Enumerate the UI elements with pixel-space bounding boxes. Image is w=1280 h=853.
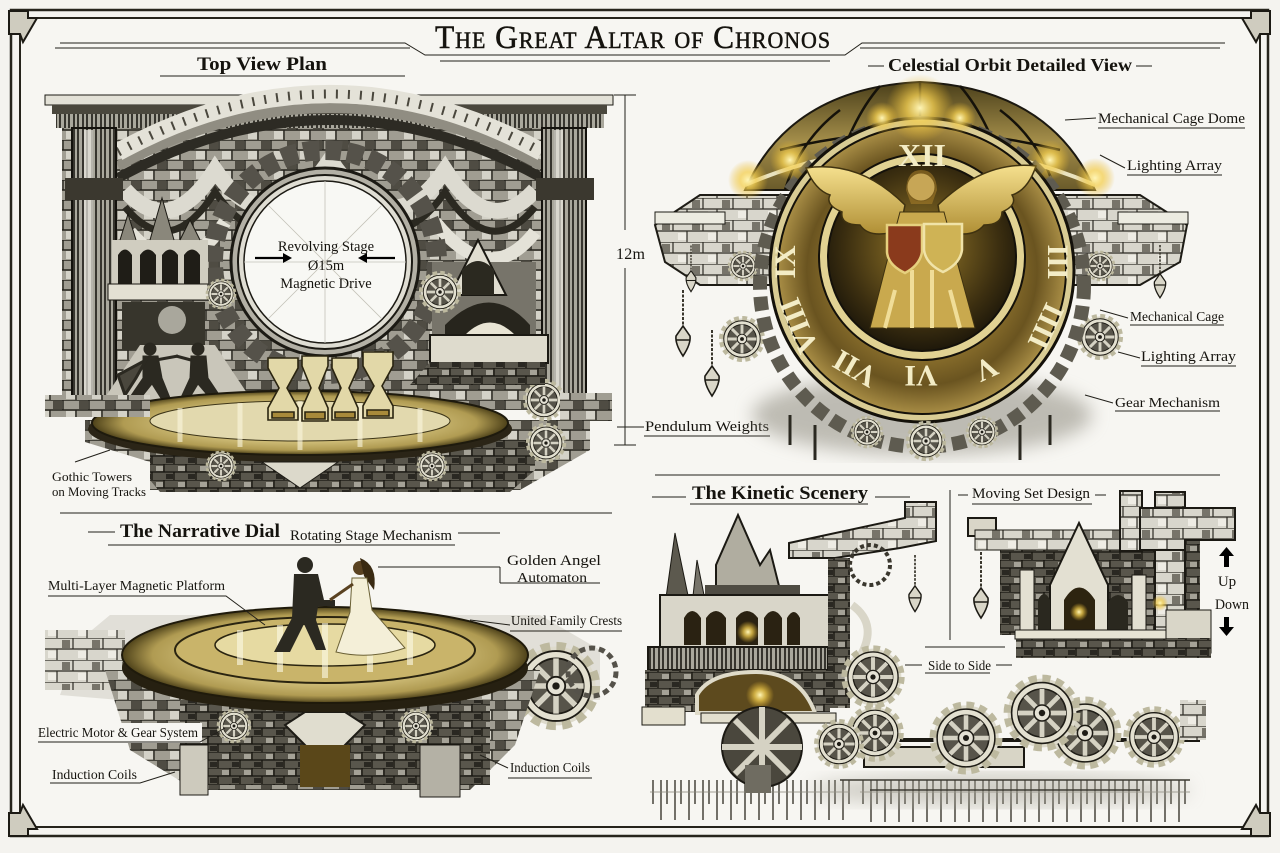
dome and orbit labels: Lighting Array (1127, 158, 1223, 174)
bottom gear mechanism (790, 415, 1050, 460)
roman numerals: V (969, 349, 1003, 388)
up and down arrows: Up (1218, 574, 1236, 590)
label: golden angel automaton (378, 553, 601, 586)
crane arm and pendulum (789, 502, 936, 708)
revolving stage disc (213, 150, 437, 374)
revolving stage disc: Ø15m (308, 258, 345, 274)
duelling figures (118, 343, 224, 404)
panel: celestial orbit detailed view (655, 55, 1245, 460)
label: gothic towers (52, 450, 146, 499)
up and down arrows: Down (1215, 597, 1249, 613)
label: induction coils right: Induction Coils (510, 761, 590, 776)
heading: narrative dial: The Narrative Dial (120, 521, 280, 542)
hourglasses (268, 352, 393, 421)
dome and orbit labels: Lighting Array (1141, 349, 1237, 365)
lighting glows (728, 74, 1115, 200)
revolving stage disc: Revolving Stage (278, 239, 374, 255)
panel: top view plan (45, 54, 770, 499)
entablature (45, 95, 613, 128)
drive gears (817, 649, 1206, 790)
label: gothic towers: on Moving Tracks (52, 484, 146, 499)
heading: top view plan: Top View Plan (197, 54, 327, 75)
label: multi-layer platform (48, 579, 265, 625)
title: The Great Altar of Chronos (435, 20, 831, 56)
dimension: 12m: 12m (616, 246, 646, 263)
label: induction coils left (50, 768, 175, 783)
label: pendulum weights: Pendulum Weights (645, 419, 769, 435)
heading: narrative dial (60, 513, 612, 545)
label: moving set design (950, 486, 1106, 640)
panel: the kinetic scenery (642, 475, 1249, 825)
roman numerals: IIII (1021, 298, 1070, 354)
moving set (968, 491, 1235, 658)
hanging pendulums (676, 245, 1166, 396)
rotating platform disc (122, 607, 528, 712)
label: united family crests (470, 614, 622, 631)
roman numerals: XII (898, 137, 946, 173)
label: pendulum weights (617, 419, 770, 436)
rotating platform (85, 381, 590, 492)
drip construction lines (650, 770, 1190, 825)
golden angel (806, 165, 1036, 328)
roman numerals: III (1041, 244, 1074, 280)
cage dome (745, 82, 1095, 190)
heading: kinetic scenery: The Kinetic Scenery (692, 483, 869, 504)
label: moving set design: Moving Set Design (972, 486, 1091, 502)
revolving stage disc: Magnetic Drive (280, 276, 372, 292)
up and down arrows (1215, 547, 1249, 636)
dome and orbit labels: Mechanical Cage (1130, 310, 1224, 325)
drape swags (125, 160, 535, 259)
dome and orbit labels: Mechanical Cage Dome (1098, 111, 1245, 127)
label: induction coils right (480, 755, 592, 778)
base machinery (105, 670, 540, 797)
roman numerals: VIII (773, 293, 825, 358)
scenery steps and base (45, 362, 612, 421)
heading: narrative dial: Rotating Stage Mechanism (290, 528, 452, 544)
castle (642, 515, 836, 793)
roman numerals: VII (828, 343, 883, 394)
label: electric motor (36, 723, 225, 743)
label: induction coils left: Induction Coils (52, 768, 137, 783)
panel: the narrative dial (36, 513, 622, 797)
dancing couple (274, 557, 405, 655)
label: multi-layer platform: Multi-Layer Magnetic Platform (48, 579, 225, 594)
title (55, 20, 1225, 61)
label: united family crests: United Family Crests (511, 614, 622, 629)
right castle on tracks (421, 240, 548, 363)
heading: kinetic scenery (652, 475, 1220, 504)
label: golden angel automaton: Automaton (517, 571, 587, 586)
label: golden angel automaton: Golden Angel (507, 553, 601, 569)
roman numerals: IX (769, 245, 802, 279)
dome and orbit labels (1065, 111, 1245, 411)
label: side to side: Side to Side (928, 659, 991, 674)
left castle on tracks (100, 198, 255, 405)
label: side to side (905, 647, 1012, 674)
left column (65, 128, 123, 403)
right column (536, 128, 594, 403)
clock dial (760, 118, 1084, 447)
wash under dial (752, 375, 1092, 455)
dome and orbit labels: Gear Mechanism (1115, 396, 1220, 411)
stage back wall (62, 125, 582, 410)
dimension: 12m (614, 95, 646, 445)
heading: celestial orbit: Celestial Orbit Detailed View (888, 55, 1132, 75)
roman numerals (769, 137, 1074, 394)
side wings (655, 195, 1188, 360)
arch (118, 94, 542, 178)
roman numerals: VI (904, 359, 938, 392)
back ring and gears (45, 615, 616, 726)
label: gothic towers: Gothic Towers (52, 469, 132, 484)
label: electric motor: Electric Motor & Gear System (38, 726, 198, 741)
